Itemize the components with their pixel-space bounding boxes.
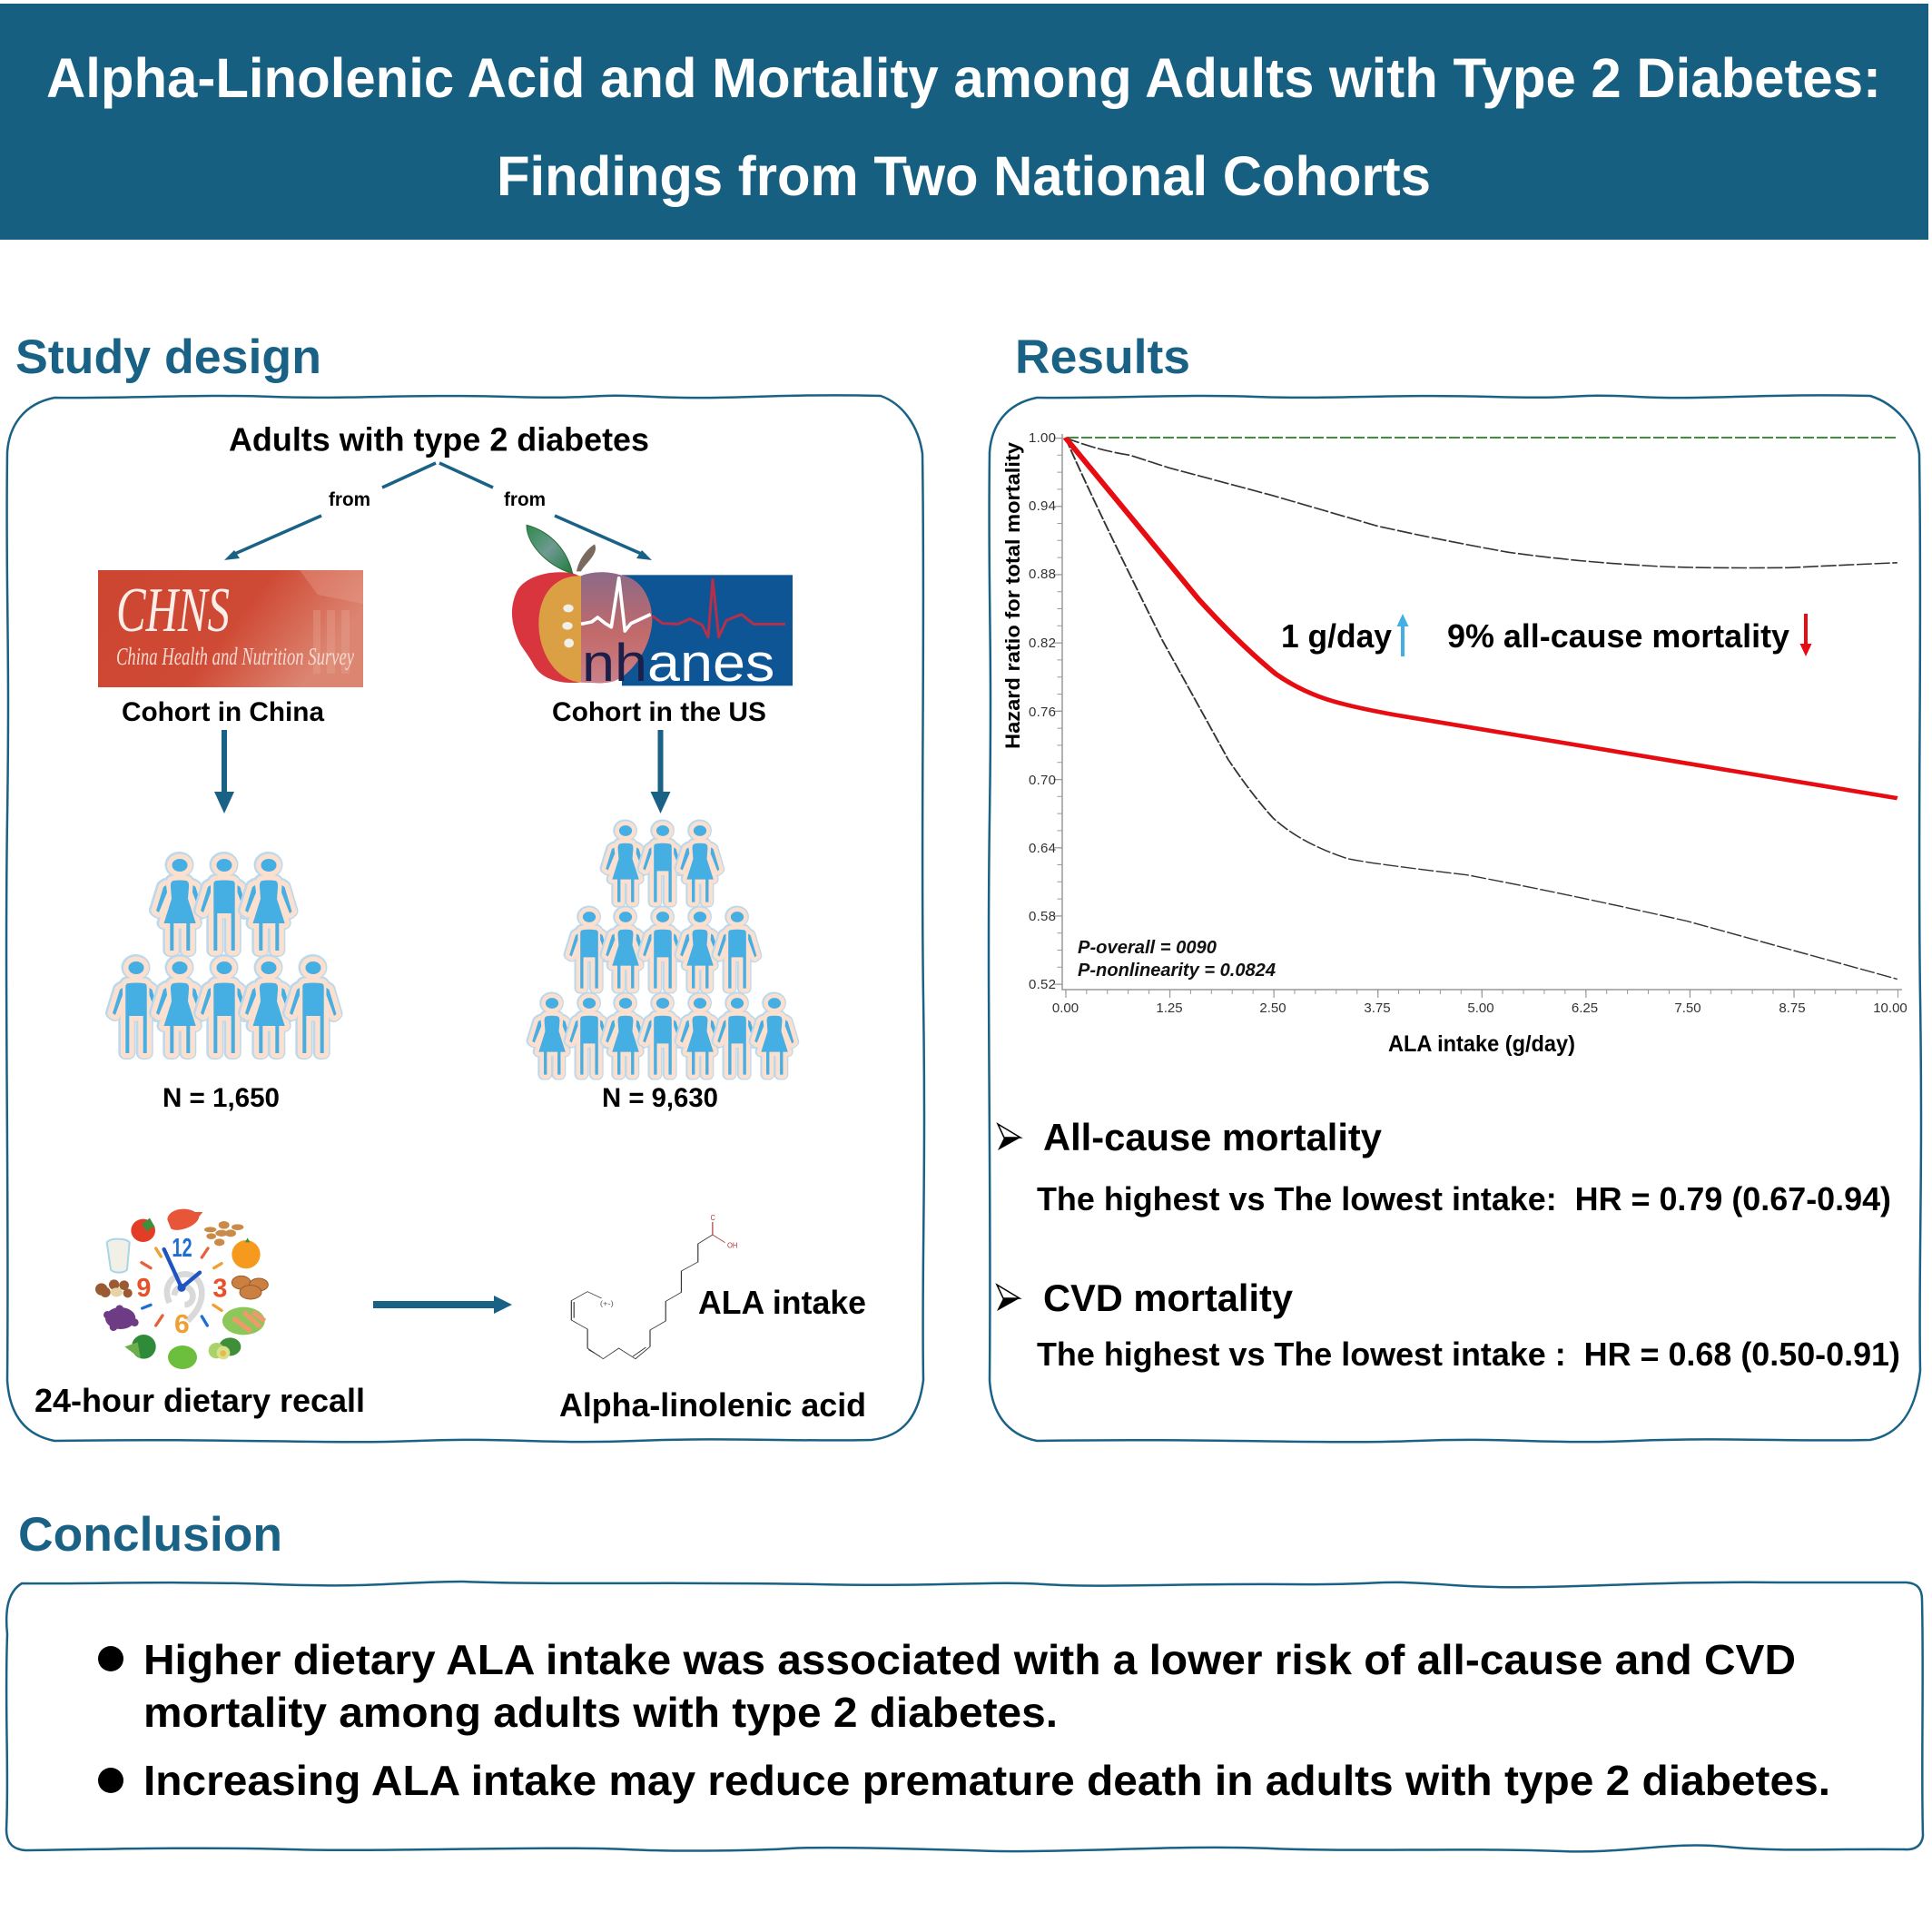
broccoli	[124, 1335, 156, 1359]
icon: food clock	[95, 1209, 268, 1369]
hazard ratio curve	[1065, 438, 1898, 798]
icon: people group US	[532, 825, 794, 1075]
x-axis tick labels: 0.00	[1052, 1000, 1079, 1016]
text: cohort in the US: Cohort in the US	[552, 697, 766, 727]
y-axis tick labels: 1.00	[1029, 430, 1056, 446]
almonds top	[204, 1221, 243, 1246]
conclusion text line three: Increasing ALA intake may reduce premature death in adults with type 2 diabetes.	[143, 1757, 1830, 1804]
bullet icon: all-cause	[998, 1124, 1020, 1150]
icon: alpha-linolenic acid molecule: (+-)	[600, 1300, 614, 1308]
chart: hazard ratio vs ALA intake	[1001, 430, 1907, 1057]
icon: alpha-linolenic acid molecule: OH	[727, 1241, 737, 1250]
y-axis tick labels: 0.76	[1029, 705, 1056, 720]
bullet point two	[98, 1768, 123, 1793]
lime	[168, 1346, 197, 1369]
arrow: US cohort to sample	[650, 730, 670, 813]
text: adults with type 2 diabetes: Adults with type 2 diabetes	[229, 421, 649, 458]
title banner: Findings from Two National Cohorts	[497, 145, 1431, 207]
annotation: 9% all-cause mortality: 9% all-cause mortality	[1447, 617, 1789, 655]
clock numbers: 3	[212, 1274, 227, 1303]
clock numbers: 9	[136, 1274, 151, 1303]
clock tick marks	[142, 1248, 222, 1326]
subheading: CVD mortality: CVD mortality	[1043, 1276, 1294, 1319]
x-axis tick labels: 2.50	[1259, 1000, 1286, 1016]
arrow: up	[1396, 614, 1409, 656]
arrow: China cohort to sample	[214, 730, 234, 813]
clock numbers	[136, 1234, 227, 1339]
y-axis tick labels: 0.58	[1029, 909, 1056, 924]
nuts right	[232, 1276, 268, 1299]
x-axis title: ALA intake (g/day)	[1388, 1031, 1575, 1057]
arrow: down	[1799, 614, 1812, 656]
conclusion text line one: Higher dietary ALA intake was associated with a lower risk of all-cause and CVD	[143, 1636, 1796, 1683]
p-values: P-nonlinearity = 0.0824	[1078, 961, 1276, 981]
x-axis tick labels: 7.50	[1674, 1000, 1701, 1016]
text: alpha-linolenic acid: Alpha-linolenic acid	[559, 1386, 866, 1424]
label: from right: from	[504, 489, 546, 510]
y-axis tick labels: 0.64	[1029, 841, 1056, 856]
avocado and cucumber	[209, 1337, 241, 1359]
x-axis tick labels: 8.75	[1779, 1000, 1806, 1016]
logo: NHANES	[512, 525, 793, 693]
milk glass	[107, 1239, 130, 1273]
y-axis tick labels: 0.82	[1029, 636, 1056, 651]
x-axis tick labels: 5.00	[1467, 1000, 1494, 1016]
heading: results: Results	[1015, 330, 1190, 384]
text: N China: N = 1,650	[163, 1083, 280, 1113]
lower confidence limit	[1065, 438, 1898, 979]
y-axis tick labels: 0.52	[1029, 977, 1056, 992]
text: ALA intake: ALA intake	[698, 1284, 866, 1321]
conclusion text line two: mortality among adults with type 2 diabetes.	[143, 1689, 1058, 1736]
arrow: recall to ALA intake	[373, 1296, 512, 1314]
upper confidence limit	[1065, 438, 1898, 567]
mango	[167, 1209, 202, 1230]
subheading: all-cause mortality: All-cause mortality	[1043, 1116, 1383, 1158]
annotation: 1 g per day increase: 1 g/day	[1281, 617, 1392, 655]
y-axis tick labels	[1029, 430, 1056, 992]
icon: alpha-linolenic acid molecule	[571, 1213, 737, 1359]
axis lines and ticks	[1058, 434, 1902, 993]
bullet point one	[98, 1646, 123, 1671]
heading: conclusion: Conclusion	[18, 1508, 282, 1562]
p-values: P-overall = 0090	[1078, 938, 1217, 958]
icon: people group China	[113, 859, 336, 1053]
x-axis tick labels: 3.75	[1364, 1000, 1391, 1016]
logo: CHNS: CHNS	[116, 576, 230, 646]
label: from left: from	[329, 489, 370, 510]
panel: conclusion	[6, 1582, 1923, 1851]
logo: CHNS	[98, 570, 363, 687]
panel outline: study design	[6, 395, 924, 1442]
panel: results	[989, 395, 1921, 1442]
reference line at 1.00	[1068, 437, 1898, 439]
y-axis tick labels: 0.70	[1029, 773, 1056, 788]
y-axis tick labels: 0.88	[1029, 567, 1056, 582]
x-axis tick labels: 6.25	[1572, 1000, 1598, 1016]
y-axis title: Hazard ratio for total mortality	[1001, 441, 1024, 749]
tomato	[131, 1218, 155, 1242]
result: CVD HR: The highest vs The lowest intake : HR = 0.68 (0.50-0.91)	[1037, 1336, 1900, 1373]
panel outline: results	[989, 395, 1921, 1442]
x-axis tick labels	[1052, 1000, 1907, 1016]
title banner	[0, 4, 1928, 240]
panel outline: conclusion	[6, 1582, 1923, 1851]
orange	[232, 1237, 261, 1268]
arrows: branching to cohorts	[224, 463, 652, 560]
text: 24-hour dietary recall: 24-hour dietary recall	[34, 1382, 365, 1419]
y-axis tick labels: 0.94	[1029, 498, 1056, 514]
logo: NHANES: nhanes	[582, 635, 774, 693]
title banner: Alpha-Linolenic Acid and Mortality among Adults with Type 2 Diabetes:	[46, 47, 1881, 109]
clock hands	[164, 1249, 200, 1290]
icon: alpha-linolenic acid molecule: C	[711, 1213, 715, 1222]
p-values	[1078, 938, 1276, 981]
logo: CHNS: China Health and Nutrition Survey	[116, 643, 354, 670]
panel: study design	[6, 395, 924, 1442]
result: all-cause HR: The highest vs The lowest intake: HR = 0.79 (0.67-0.94)	[1037, 1180, 1891, 1217]
text: N US: N = 9,630	[602, 1083, 718, 1113]
clock numbers: 6	[174, 1310, 190, 1339]
x-axis tick labels: 10.00	[1873, 1000, 1907, 1016]
bullet icon: CVD	[997, 1285, 1020, 1311]
heading: study design: Study design	[15, 330, 321, 384]
x-axis tick labels: 1.25	[1156, 1000, 1183, 1016]
text: cohort in China: Cohort in China	[122, 697, 324, 727]
nuts left	[95, 1279, 133, 1297]
salad	[222, 1307, 265, 1335]
grapes	[104, 1305, 139, 1331]
clock spiral	[167, 1274, 202, 1321]
clock numbers: 12	[172, 1234, 192, 1263]
